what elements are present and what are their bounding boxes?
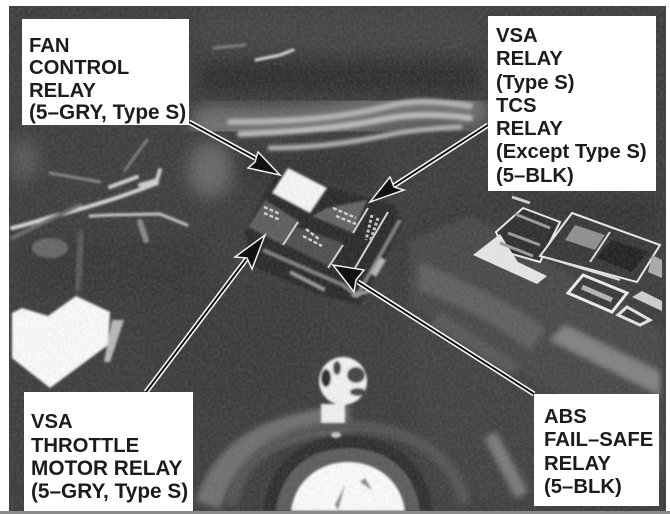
callout: ABS fail-safe relay: ABS (544, 406, 587, 428)
photo: mounting bolt (319, 357, 367, 438)
callout: fan control relay: CONTROL (29, 57, 129, 79)
bottom edge (0, 511, 670, 514)
callout: fan control relay: RELAY (29, 80, 96, 102)
callout: ABS fail-safe relay (534, 394, 659, 506)
callout: VSA throttle motor relay: (5–GRY, Type S) (31, 480, 188, 503)
callout: VSA throttle motor relay: MOTOR RELAY (31, 457, 183, 480)
callout: VSA throttle motor relay: VSA (31, 411, 73, 433)
callout: ABS fail-safe relay: FAIL–SAFE (544, 429, 653, 451)
photo: fuse box cover (408, 215, 662, 480)
callout: ABS fail-safe relay: RELAY (544, 453, 611, 475)
callout: VSA relay / TCS relay: (Except Type S) (496, 141, 647, 163)
photo: white connector block (12, 296, 124, 388)
callout: fan control relay (22, 19, 189, 125)
photo: strut tower dome (208, 418, 522, 511)
callout: VSA relay / TCS relay: VSA (496, 25, 538, 47)
photo: hoses and wires (12, 45, 470, 290)
callout: VSA relay / TCS relay: RELAY (496, 48, 563, 70)
callout: VSA throttle motor relay (24, 392, 193, 511)
arrow: fan control relay (189, 122, 280, 175)
photo: fuse box lid diagram (473, 197, 662, 325)
arrow: ABS fail-safe relay (333, 265, 534, 394)
callout: VSA relay / TCS relay: (5–BLK) (496, 165, 574, 187)
arrow: VSA / TCS relay (370, 125, 488, 202)
callout: fan control relay: (5–GRY, Type S) (29, 101, 186, 124)
photo: dark and mid-tone regions (9, 62, 654, 229)
callout: ABS fail-safe relay: (5–BLK) (544, 476, 622, 498)
photo: relay box (245, 168, 402, 305)
callout: VSA relay / TCS relay: (Type S) (496, 72, 575, 94)
callout: VSA relay / TCS relay: RELAY (496, 118, 563, 140)
callout: VSA relay / TCS relay (488, 16, 656, 191)
callout: fan control relay: FAN (29, 35, 70, 57)
arrow: VSA throttle motor relay (146, 235, 265, 392)
callout: VSA relay / TCS relay: TCS (496, 95, 537, 117)
callout: VSA throttle motor relay: THROTTLE (31, 435, 139, 457)
